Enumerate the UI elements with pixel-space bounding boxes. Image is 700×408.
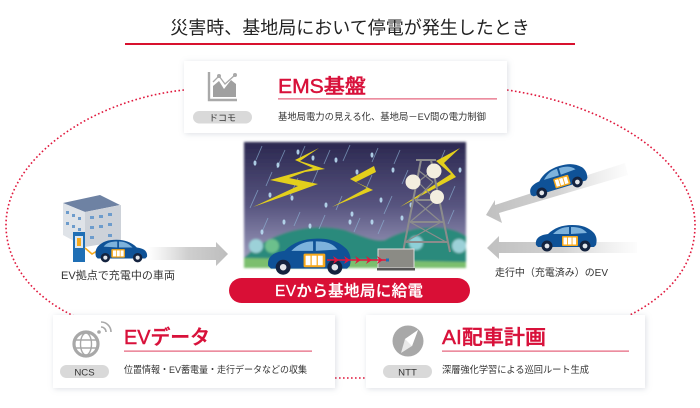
banner: EVから基地局に給電 [229, 278, 470, 303]
group: EV charging site [61, 195, 228, 282]
icon: charging arrows [327, 256, 389, 264]
panel: EVデータ [53, 315, 335, 388]
icon: building [63, 195, 121, 247]
text: AI description: 深層強化学習による巡回ルート生成 [442, 364, 589, 375]
heading: EMS基盤: EMS基盤 [278, 75, 366, 98]
arrow: upper [486, 163, 628, 223]
heading: AI配車計画: AI配車計画 [442, 326, 546, 349]
icon: lower car [536, 225, 597, 252]
badge: NCS: NCS [74, 368, 95, 378]
panel: AI配車計画 [366, 315, 645, 388]
panel: EMS基盤 [184, 61, 507, 133]
title: 災害時、基地局において停電が発生したとき [170, 18, 530, 38]
icon: charger [73, 232, 97, 262]
icon: chart [209, 72, 237, 100]
icon: tower [403, 160, 450, 252]
text: EV data description: 位置情報・EV蓄電量・走行データなどの収集 [124, 364, 308, 375]
arrow: lower [487, 236, 637, 259]
banner: EVから基地局に給電: EVから基地局に給電 [275, 282, 423, 300]
badge: ドコモ: ドコモ [209, 113, 236, 123]
text: driving EV label: 走行中（充電済み）のEV [495, 266, 608, 279]
icon: upper car [525, 159, 590, 201]
scene: storm and base station [244, 142, 466, 275]
badge: NTT [383, 365, 432, 378]
icon: charging car [95, 240, 147, 262]
badge: NCS [60, 365, 109, 378]
badge: NTT: NTT [398, 368, 417, 378]
icon: compass [392, 326, 424, 356]
group: driving EVs [486, 159, 637, 279]
badge: ドコモ [193, 111, 252, 124]
heading: EVデータ: EVデータ [124, 325, 210, 349]
text: EMS description: 基地局電力の見える化、基地局－EV間の電力制御 [278, 111, 486, 122]
icon: power unit [377, 249, 415, 270]
icon: lightning bolts [253, 148, 460, 207]
text: charging EV label: EV拠点で充電中の車両 [61, 268, 175, 282]
icon: car supplying power [268, 239, 351, 275]
icon: globe [74, 322, 111, 356]
dotted connection ring [6, 90, 695, 378]
arrow: to base station [148, 242, 228, 266]
rain [250, 145, 455, 234]
